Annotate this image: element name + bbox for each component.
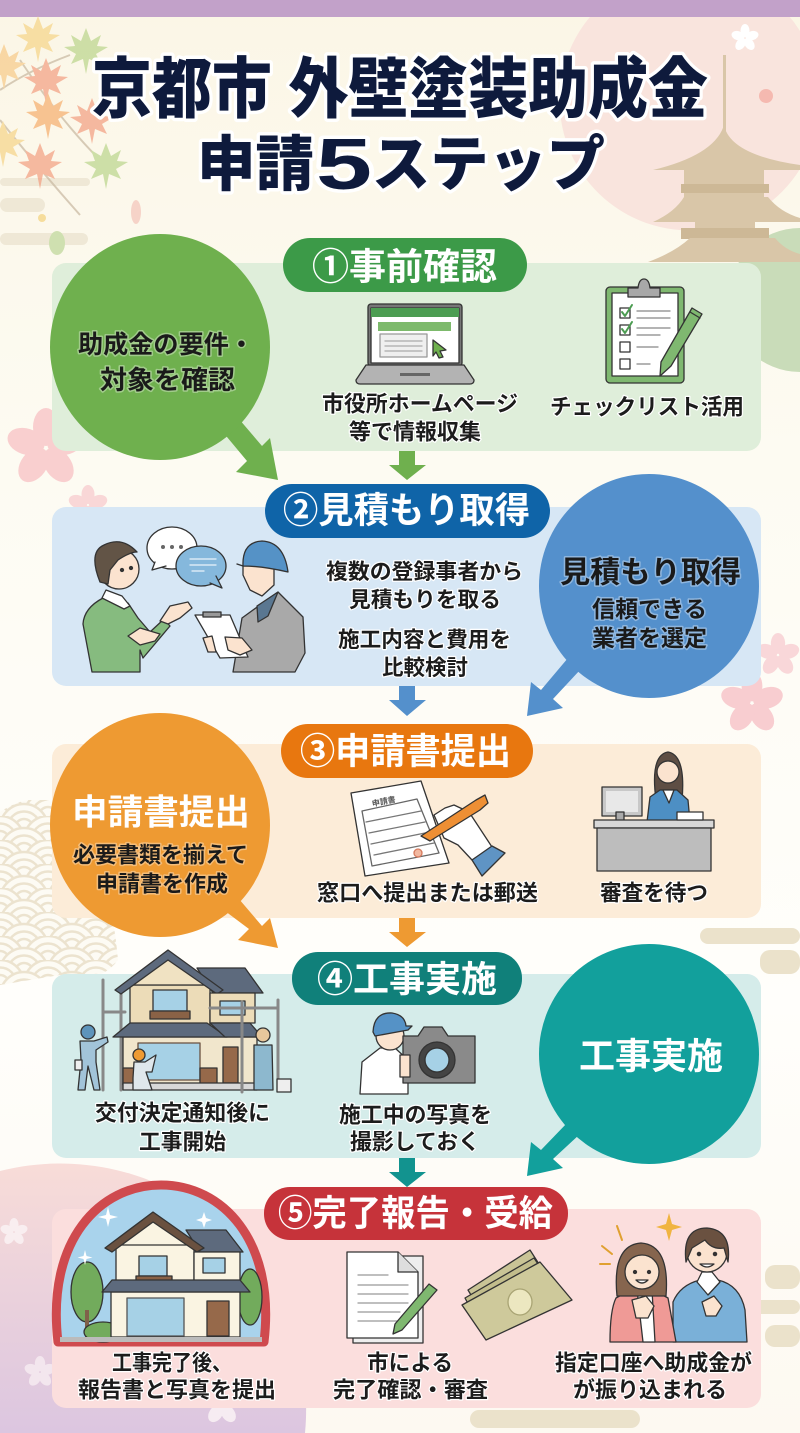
step 4 bubble with arrow: 工事実施 [579,1036,723,1076]
arch caption [78,1350,276,1402]
icon: clipboard [606,279,702,383]
down arrow 3 [389,918,426,947]
panel: step 3 [50,713,761,948]
step 3 bubble with arrow [50,713,278,948]
house caption: 交付決定通知後に [95,1100,270,1126]
title: 5 [316,125,372,205]
laptop caption: 等で情報収集 [349,420,481,444]
clipboard caption: チェックリスト活用 [550,394,744,420]
panel: step 5 [52,1185,761,1408]
step 2 bubble with arrow: 信頼できる [592,596,707,622]
step 4 bubble with arrow [527,944,759,1176]
down arrow 2 [389,686,426,716]
house caption [95,1100,270,1154]
illustration: consultation [83,527,305,672]
title [92,52,708,205]
step 1 bubble with arrow: 助成金の要件・ [78,331,254,359]
step 3 bubble with arrow: 必要書類を揃えて [73,842,248,868]
icon: reception desk [594,752,714,871]
house caption: 工事開始 [139,1130,226,1154]
icon: application form and pen: 申請書 [371,794,396,808]
panel: step 4 [52,944,761,1187]
down arrow 4 [389,1158,426,1187]
documents caption [333,1350,488,1402]
documents caption: 完了確認・審査 [333,1378,488,1402]
title: 申請 [197,132,314,198]
reception caption: 審査を待つ [600,880,708,906]
step 2 text: 比較検討 [382,656,468,680]
arch illustration: finished house [56,1185,266,1342]
title: ステップ [372,132,605,198]
icon: documents and pen [347,1252,437,1343]
photographer caption: 撮影しておく [350,1130,480,1154]
step 3 bubble with arrow: 申請書を作成 [96,872,228,896]
step 5 heading pill: ⑤完了報告・受給 [278,1192,553,1234]
panel: step 1 [50,234,761,480]
photographer caption: 施工中の写真を [339,1102,492,1128]
step 3 bubble with arrow: 申請書提出 [72,794,250,832]
icon: application form and pen [351,781,505,876]
step 2 bubble with arrow [527,474,759,716]
laptop caption: 市役所ホームページ [322,392,518,416]
photographer caption [339,1102,492,1154]
workers [75,1025,291,1092]
couple caption: が振り込まれる [573,1378,727,1402]
arch caption: 報告書と写真を提出 [78,1378,276,1402]
icon: laptop [356,304,474,384]
step 1 heading pill [283,238,527,292]
documents caption: 市による [367,1350,453,1376]
step 2 text: 施工内容と費用を [338,628,511,652]
illustration: house under repainting [75,950,291,1092]
step 3 heading pill [281,724,533,778]
arch caption: 工事完了後、 [112,1350,232,1376]
title: 京都市 外壁塗装助成金 [92,52,708,126]
step 1 heading pill: ①事前確認 [312,246,497,288]
step 2 text [326,560,523,680]
step 2 text: 見積もりを取る [349,588,501,612]
step 4 heading pill [292,952,522,1005]
form caption: 窓口へ提出または郵送 [317,880,538,906]
down arrow 1 [389,451,426,480]
couple caption: 指定口座へ助成金が [555,1350,752,1376]
panel: step 2 [52,474,761,716]
step 2 heading pill: ②見積もり取得 [283,490,530,530]
step 3 heading pill: ③申請書提出 [300,730,511,772]
step 1 bubble with arrow [50,234,278,480]
icon: photographer [360,1013,475,1094]
maple [0,16,128,215]
step 2 bubble with arrow: 見積もり取得 [560,556,741,590]
icon: banknotes [462,1250,572,1340]
illustration: happy couple [600,1213,747,1342]
step 4 heading pill: ④工事実施 [317,958,497,1000]
step 2 heading pill [265,484,550,538]
step 2 bubble with arrow: 業者を選定 [592,625,707,651]
laptop caption [322,392,518,444]
step 1 bubble with arrow: 対象を確認 [100,365,235,395]
pagoda [648,55,800,262]
couple caption [555,1350,752,1402]
step 2 text: 複数の登録事者から [326,560,523,584]
